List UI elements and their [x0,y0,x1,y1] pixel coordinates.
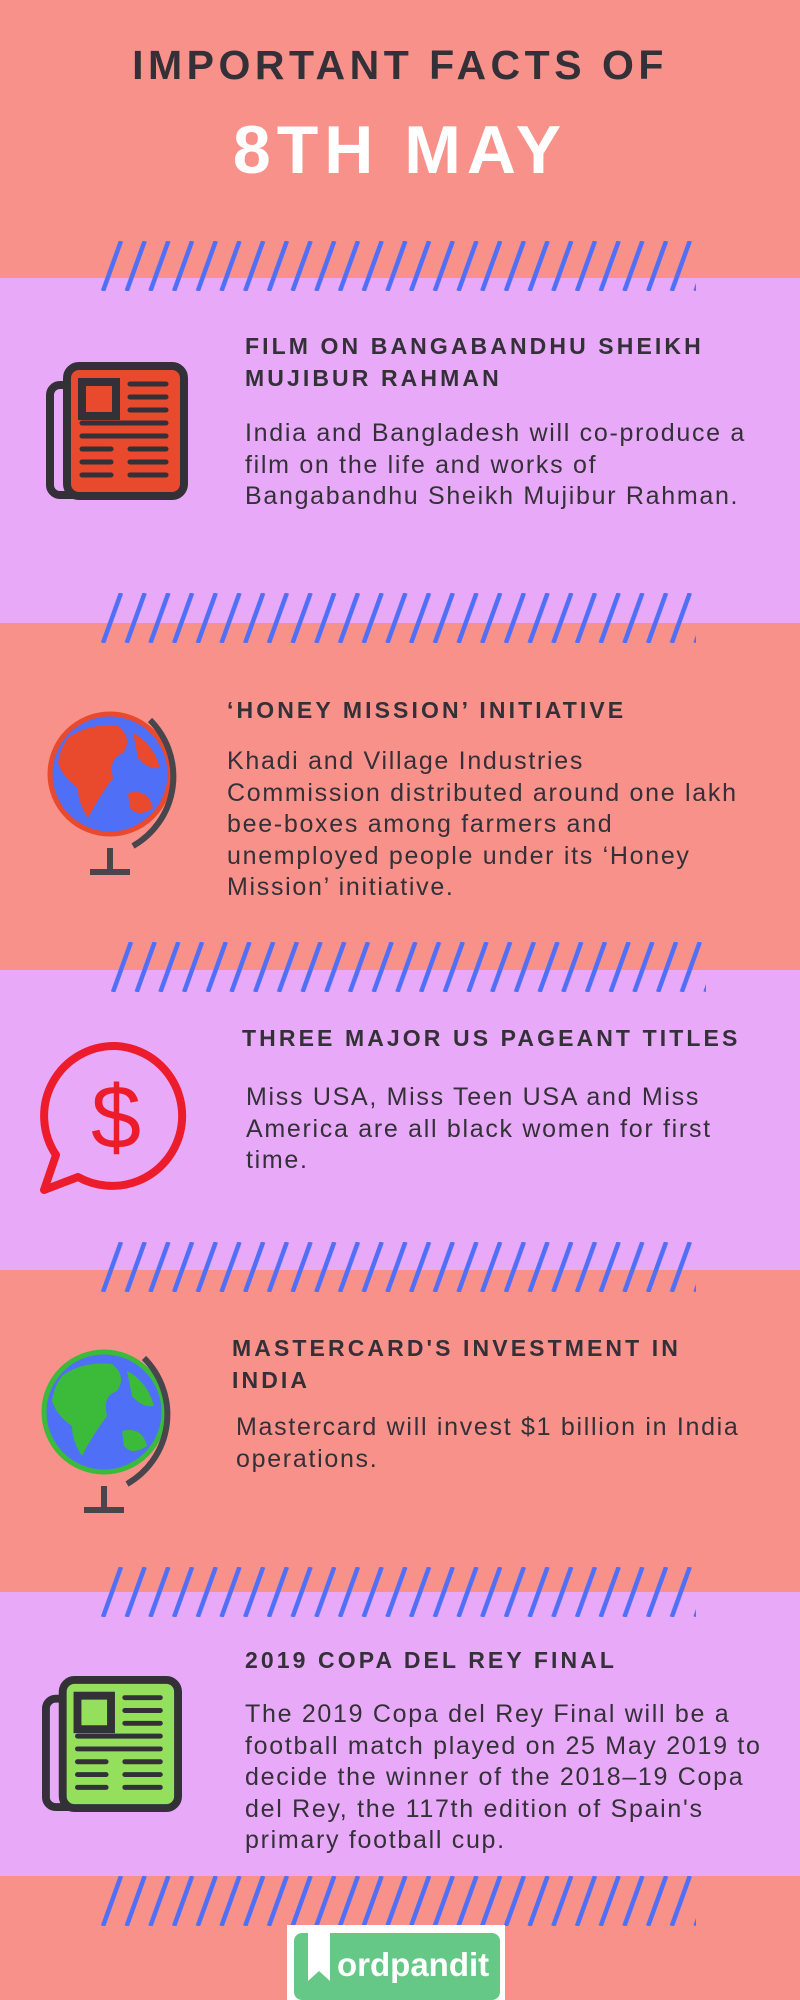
text 1: film on the life and works of [245,450,597,478]
text 5: decide the winner of the 2018–19 Copa [245,1763,744,1791]
stripes 4 [100,1242,696,1292]
heading 4: MASTERCARD'S INVESTMENT IN [232,1335,681,1361]
text 4: Mastercard will invest $1 billion in India [236,1413,740,1441]
text 5: del Rey, the 117th edition of Spain's [245,1794,704,1822]
icon: newspaper green [42,1676,182,1812]
heading 1: MUJIBUR RAHMAN [245,365,502,391]
heading 4: INDIA [232,1367,310,1393]
stripes 6 [100,1876,696,1926]
heading 2: ‘HONEY MISSION’ INITIATIVE [227,697,626,723]
text 5: primary football cup. [245,1826,506,1854]
text 2 [227,747,738,901]
text 1 [245,419,746,510]
text 3: America are all black women for first [246,1114,712,1142]
text 1: Bangabandhu Sheikh Mujibur Rahman. [245,482,739,510]
text 2: Mission’ initiative. [227,873,455,901]
title: IMPORTANT FACTS OF [132,42,668,88]
text 3: Miss USA, Miss Teen USA and Miss [246,1083,700,1111]
stripes 1 [100,241,696,291]
heading 4 [232,1335,681,1393]
title [132,42,668,188]
text 3: time. [246,1146,309,1174]
text 4: operations. [236,1444,378,1472]
heading 5: 2019 COPA DEL REY FINAL [245,1647,617,1673]
text 1: India and Bangladesh will co-produce a [245,419,746,447]
icon: dollar bubble: $ [91,1068,141,1168]
logo [287,1925,505,2000]
stripes 2 [100,593,696,643]
text 5: football match played on 25 May 2019 to [245,1732,762,1760]
text 2: bee-boxes among farmers and [227,810,613,838]
title: 8TH MAY [233,112,567,188]
text 2: unemployed people under its ‘Honey [227,842,691,870]
icon: newspaper red [46,362,188,500]
text 2: Khadi and Village Industries [227,747,584,775]
text 5: The 2019 Copa del Rey Final will be a [245,1700,730,1728]
stripes 3 [110,942,706,992]
icon: globe green [42,1350,170,1513]
heading 3: THREE MAJOR US PAGEANT TITLES [242,1025,740,1051]
logo: ordpandit [337,1946,489,1983]
text 4 [236,1413,740,1472]
text 3 [246,1083,712,1174]
stripes 5 [100,1567,696,1617]
icon: globe red [48,712,176,875]
text 5 [245,1700,762,1854]
icon: dollar bubble [40,1042,186,1194]
heading 1 [245,333,704,391]
heading 1: FILM ON BANGABANDHU SHEIKH [245,333,704,359]
text 2: Commission distributed around one lakh [227,778,738,806]
